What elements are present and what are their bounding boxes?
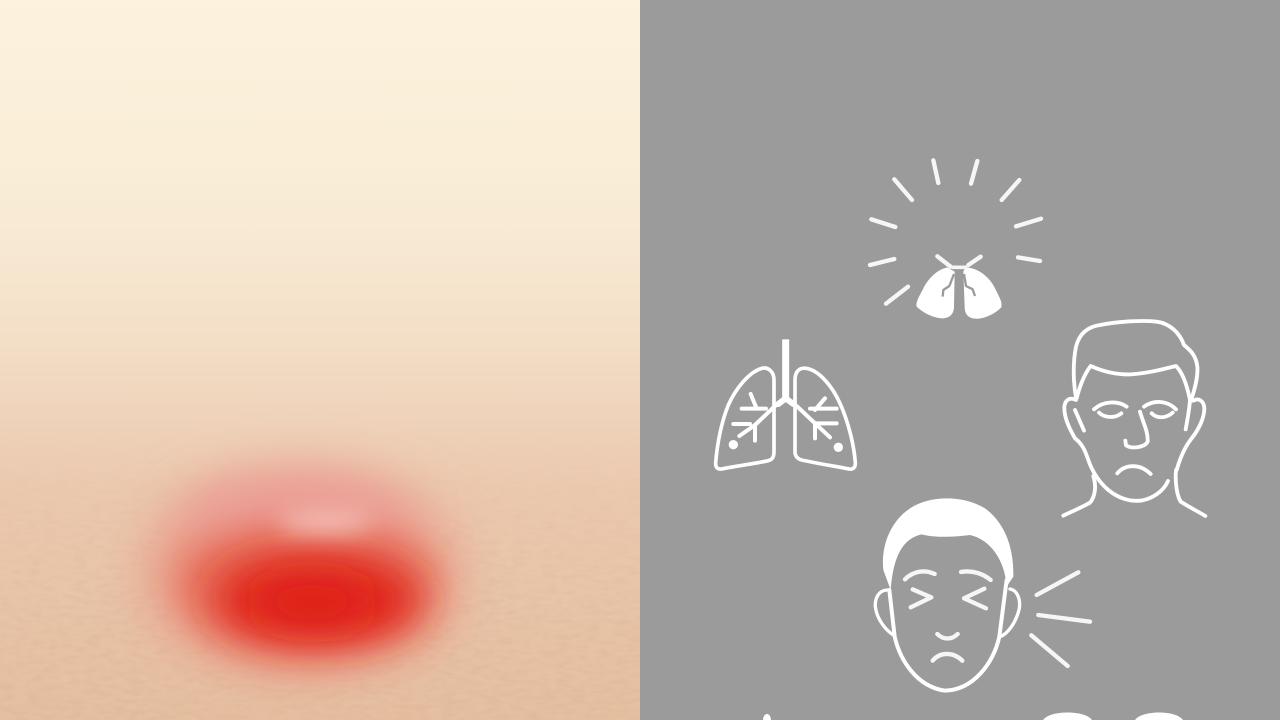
hair <box>883 498 1013 590</box>
icon: sad man's face <box>1063 321 1205 516</box>
icon: lungs outline <box>716 339 855 469</box>
cropped icons at lower edge <box>763 712 1183 720</box>
icon: radiating chest pain lungs <box>870 160 1041 319</box>
panel: skin photograph <box>0 0 640 720</box>
red lump <box>150 479 450 664</box>
panel: grey symptoms background <box>640 0 1280 720</box>
icon: man with headache and ear pain <box>875 498 1090 691</box>
skin texture <box>0 400 640 720</box>
